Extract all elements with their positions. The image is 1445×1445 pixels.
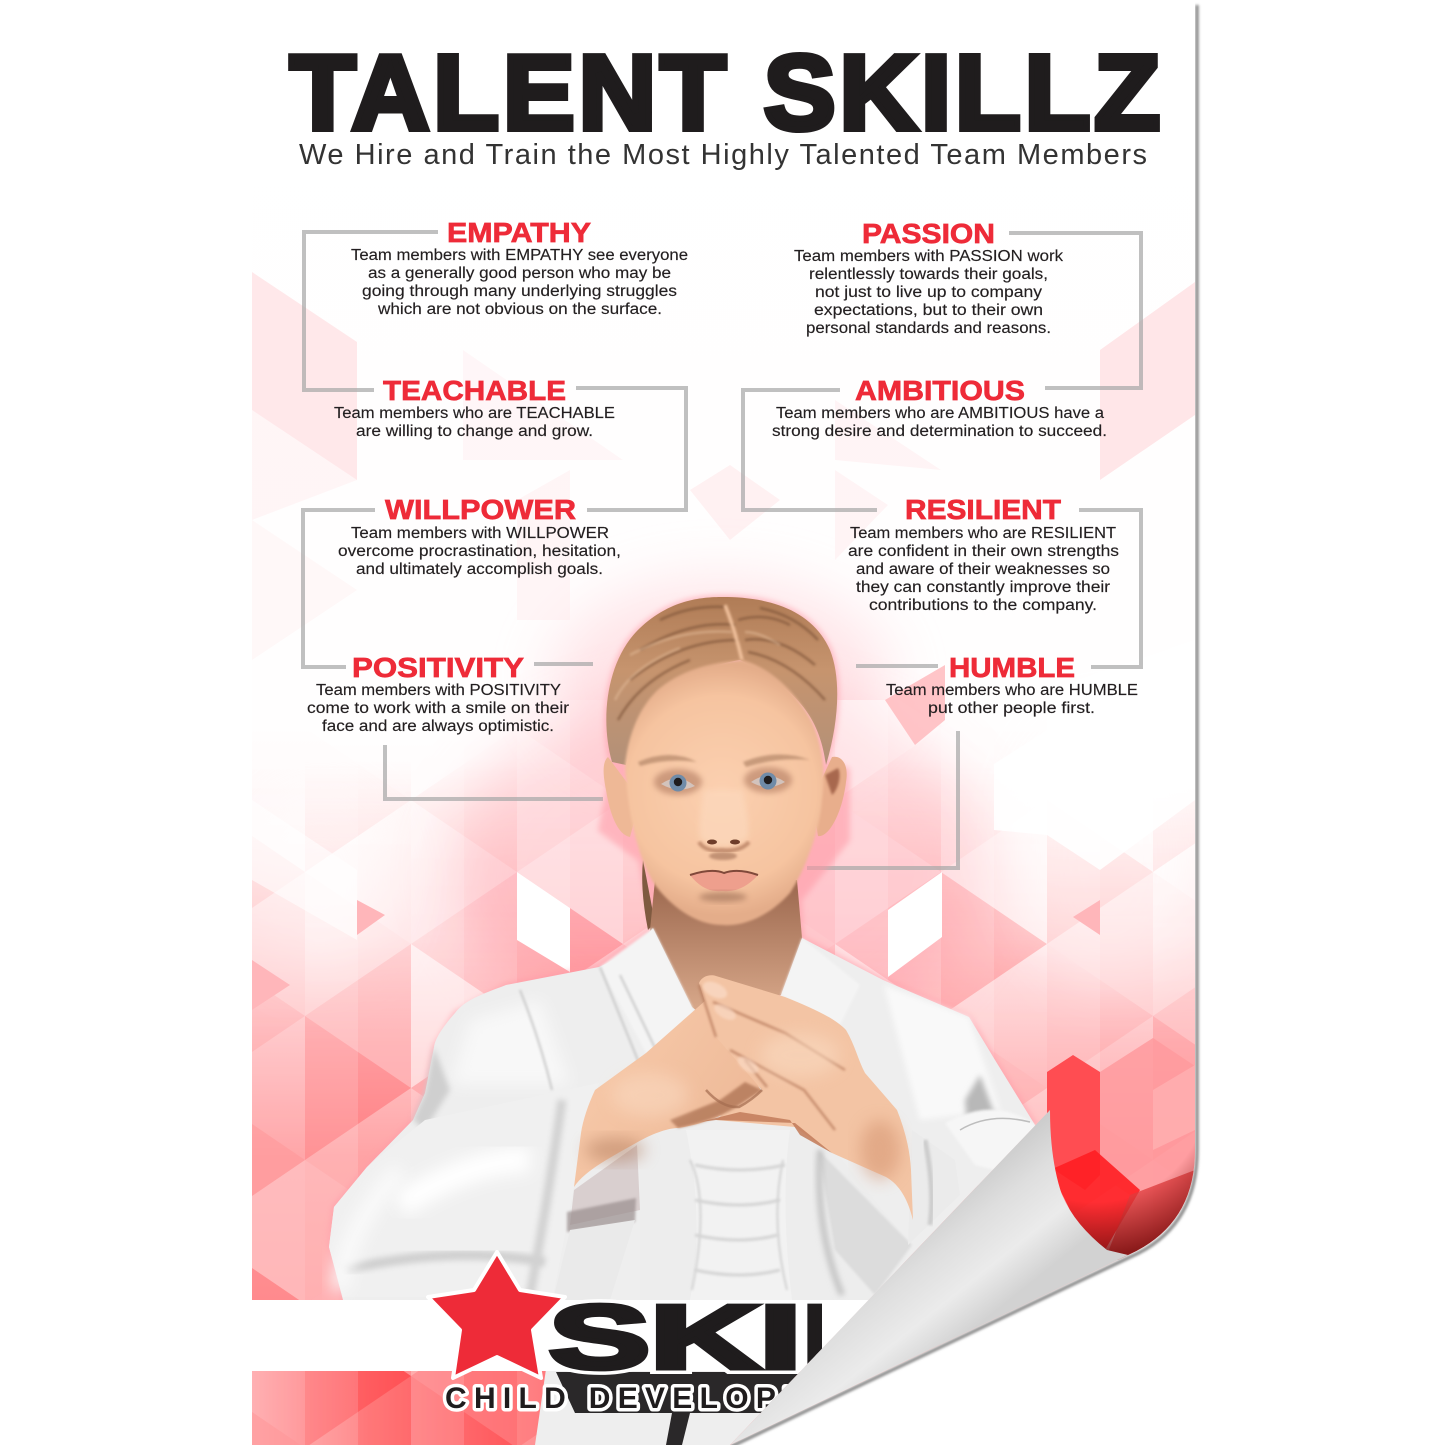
panel: willpower: and ultimately accomplish goals. bbox=[356, 561, 603, 578]
panel: ambitious bbox=[772, 375, 1107, 440]
panel: humble bbox=[886, 652, 1138, 717]
figure: girl in karate gi bbox=[329, 597, 1040, 1445]
panel: empathy: as a generally good person who may be bbox=[368, 265, 671, 282]
belt bbox=[556, 1372, 800, 1445]
subtitle: We Hire and Train the Most Highly Talented Team Members bbox=[299, 139, 1147, 171]
panel: poster background bbox=[250, 0, 1200, 1445]
panel: resilient: RESILIENT bbox=[905, 494, 1061, 525]
panel: positivity: come to work with a smile on their bbox=[307, 700, 569, 717]
logo tagline bbox=[442, 1384, 788, 1412]
panel: empathy: Team members with EMPATHY see everyone bbox=[351, 247, 688, 264]
panel: passion: personal standards and reasons. bbox=[806, 320, 1051, 337]
panel: passion: relentlessly towards their goals, bbox=[809, 266, 1048, 283]
panel: resilient: they can constantly improve their bbox=[856, 579, 1110, 596]
panel: resilient: Team members who are RESILIENT bbox=[850, 525, 1117, 542]
panel: resilient bbox=[848, 494, 1119, 614]
panel: positivity: Team members with POSITIVITY bbox=[316, 682, 561, 699]
logo tagline: CHILD DEVELOPMENT bbox=[445, 1382, 890, 1415]
panel: positivity bbox=[307, 652, 569, 735]
poster shadow bbox=[730, 5, 1197, 1445]
panel: empathy: going through many underlying struggles bbox=[362, 283, 677, 300]
panel: resilient: are confident in their own strengths bbox=[848, 543, 1119, 560]
panel: positivity: POSITIVITY bbox=[352, 652, 524, 683]
panel: ambitious: AMBITIOUS bbox=[855, 375, 1025, 406]
panel: passion: not just to live up to company bbox=[815, 284, 1042, 301]
panel: humble: HUMBLE bbox=[949, 652, 1075, 683]
panel: teachable: are willing to change and grow. bbox=[356, 423, 593, 440]
icon: head bbox=[604, 597, 847, 925]
logo wordmark bbox=[548, 1299, 822, 1375]
panel: humble: put other people first. bbox=[928, 700, 1095, 717]
panel: teachable bbox=[334, 375, 615, 440]
panel: passion: Team members with PASSION work bbox=[794, 248, 1063, 265]
page curl bbox=[730, 1110, 1128, 1445]
panel: humble: Team members who are HUMBLE bbox=[886, 682, 1138, 699]
panel: ambitious: strong desire and determination to succeed. bbox=[772, 423, 1107, 440]
icon: left hand bbox=[574, 1000, 762, 1187]
panel: teachable: TEACHABLE bbox=[383, 375, 566, 406]
panel: positivity: face and are always optimistic. bbox=[322, 718, 554, 735]
panel: empathy: which are not obvious on the surface. bbox=[377, 301, 662, 318]
panel: ambitious: Team members who are AMBITIOUS have a bbox=[776, 405, 1104, 422]
logo band bbox=[252, 1250, 868, 1445]
panel: willpower bbox=[338, 494, 621, 578]
panel: willpower: overcome procrastination, hesitation, bbox=[338, 543, 621, 560]
logo tagline: CHILD DEVELOPMENT bbox=[445, 1382, 890, 1415]
title: TALENT SKILLZ bbox=[290, 34, 1164, 152]
panel: empathy bbox=[351, 217, 688, 318]
icon: logo star bbox=[428, 1252, 565, 1378]
panel: empathy: EMPATHY bbox=[447, 217, 591, 248]
logo wordmark: SKILLZ bbox=[549, 1288, 1079, 1388]
panel: passion bbox=[794, 218, 1063, 337]
logo wordmark: SKILLZ bbox=[549, 1288, 1079, 1388]
panel: resilient: contributions to the company. bbox=[869, 597, 1097, 614]
panel: passion: PASSION bbox=[862, 218, 995, 249]
panel: willpower: WILLPOWER bbox=[385, 494, 576, 525]
icon: right hand bbox=[699, 975, 913, 1220]
panel: willpower: Team members with WILLPOWER bbox=[351, 525, 609, 542]
panel: teachable: Team members who are TEACHABLE bbox=[334, 405, 615, 422]
connector lines bbox=[303, 232, 1141, 868]
panel: resilient: and aware of their weaknesses so bbox=[856, 561, 1110, 578]
panel: passion: expectations, but to their own bbox=[814, 302, 1043, 319]
